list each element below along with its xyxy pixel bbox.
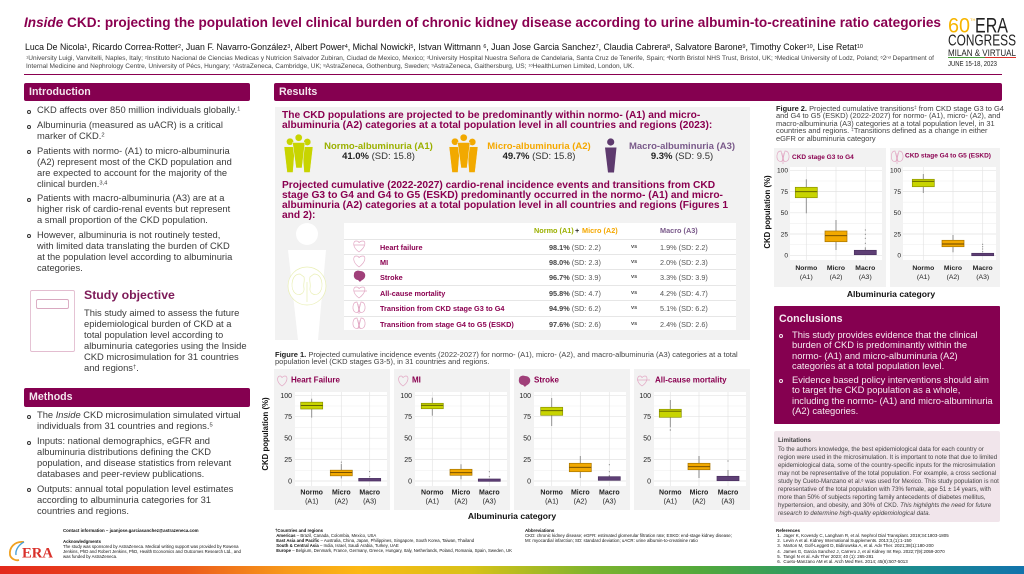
chart: CKD stage G3 to G4: (A1) bbox=[800, 274, 813, 281]
abbreviations footnote: Abbreviations bbox=[525, 528, 554, 532]
bottom gradient bar bbox=[0, 566, 1024, 574]
normo box bbox=[795, 179, 817, 213]
congress logo: 60 bbox=[948, 14, 970, 38]
abbreviations footnote bbox=[525, 528, 732, 543]
affiliations: 1University Luigi, Vanvitelli, Naples, Italy; 2Instituto Nacional de Ciencias Medicas y Nutricion Salvador Zubiran, Ciudad de Mexico, Mexico; 3University Hospital Nuestra Señora de Candelaria, Santa Cruz de Tenerife, Spain; 4North Bristol NHS Trust, Bristol, UK; 5Medical University of Lodz, Poland; 62nd Department of bbox=[26, 54, 934, 62]
intro bullet 5: However, albuminuria is not routinely tested, bbox=[37, 230, 220, 240]
chart: CKD stage G4 to G5: (A1) bbox=[917, 274, 930, 281]
conclusion 2 bbox=[779, 374, 993, 416]
acknowledgments: was funded by AstraZeneca. bbox=[63, 554, 117, 559]
chart: stroke: (A1) bbox=[545, 499, 558, 506]
chart: heart failure: 75 bbox=[284, 414, 292, 421]
row: heart failure: 1.9% (SD: 2.2) bbox=[660, 243, 708, 252]
chart: all-cause mortality: Macro bbox=[718, 490, 738, 497]
chart: heart failure: Macro bbox=[359, 490, 380, 497]
limitations text: research to determine high-quality epidemiological data. bbox=[778, 510, 930, 517]
chart: CKD stage G4 to G5: 50 bbox=[894, 210, 901, 217]
stroke title bbox=[519, 376, 559, 387]
micro box bbox=[330, 462, 352, 478]
acknowledgments bbox=[63, 538, 241, 559]
countries and regions footnote: South & Central Asia – India, Israel, Saudi Arabia, Turkey, UAE bbox=[276, 543, 399, 548]
introduction heading bbox=[24, 83, 250, 101]
panel: results summary bbox=[275, 107, 750, 340]
normo box bbox=[421, 398, 443, 416]
references: 1. Jager K, Kovesdy C, Langham R, et al. Nephrol Dial Transplant. 2019;34:1803-1805 bbox=[777, 533, 949, 538]
chart: heart failure: (A1) bbox=[305, 499, 318, 506]
intro bullet 5: with limited data translating the burden of CKD bbox=[37, 240, 230, 250]
chart: MI: 50 bbox=[404, 436, 412, 443]
methods bullet 3: Outputs: annual total population level estimates bbox=[37, 484, 233, 494]
conclusion 2: to target the CKD population as a whole, bbox=[792, 384, 960, 395]
chart: stroke: (A3) bbox=[603, 499, 616, 506]
intro bullet 3: clinical burden.3,4 bbox=[37, 178, 107, 188]
row: MI: vs bbox=[631, 259, 637, 265]
chart: all-cause mortality bbox=[634, 369, 750, 510]
chart: all-cause mortality: 25 bbox=[643, 457, 651, 464]
micro box bbox=[569, 456, 591, 478]
methods bullet 2 bbox=[27, 436, 231, 480]
references: 4. James G, Garcia Sanchez J, Carrero J, et al Kidney Int Rep. 2022;7(9):2059-2070 bbox=[777, 549, 945, 554]
methods bullet 2: Inputs: national demographics, eGFR and bbox=[37, 436, 210, 446]
intro bullet 5: categories. bbox=[37, 262, 83, 272]
y axis label figure 2: CKD population (%) bbox=[763, 175, 772, 249]
chart: CKD stage G3 to G4: Normo bbox=[795, 265, 817, 272]
figure 2 caption: countries and regions. ‡Transitions defined as a change in either bbox=[776, 126, 988, 135]
congress logo: ERA bbox=[975, 14, 1008, 38]
intro bullet 4: a small proportion of the CKD population. bbox=[37, 215, 208, 225]
chart: CKD stage G3 to G4: (A3) bbox=[859, 274, 872, 281]
study objective text: albuminuria categories using the Inside bbox=[84, 340, 247, 351]
chart: CKD stage G3 to G4: (A2) bbox=[830, 274, 842, 281]
chart: all-cause mortality: 50 bbox=[643, 436, 651, 443]
chart: stroke bbox=[514, 369, 630, 510]
chart: CKD stage G4 to G5: (A3) bbox=[976, 274, 989, 281]
methods bullet 1: The Inside CKD microsimulation simulated virtual bbox=[37, 410, 241, 420]
micro box bbox=[825, 220, 847, 250]
row: stroke: Stroke bbox=[380, 273, 403, 282]
row: heart failure bbox=[344, 239, 736, 255]
contact information: Contact information – juanjose.garciasanchez@astrazeneca.com bbox=[63, 528, 199, 532]
chart: CKD stage G4 to G5: 25 bbox=[894, 231, 901, 238]
y axis label figure 1: CKD population (%) bbox=[261, 397, 270, 471]
row: stroke: vs bbox=[631, 274, 637, 280]
results heading bbox=[274, 83, 1002, 101]
chart: all-cause mortality: (A3) bbox=[721, 499, 735, 506]
chart: CKD stage G3 to G4: 50 bbox=[781, 210, 788, 217]
chart: all-cause mortality: (A2) bbox=[692, 499, 706, 506]
results heading: Results bbox=[279, 86, 317, 98]
intro bullet 3 bbox=[27, 146, 232, 190]
icon: micro-albuminuria people bbox=[449, 134, 478, 172]
chart: MI: 0 bbox=[408, 478, 412, 486]
acknowledgments: The study was sponsored by AstraZeneca. Medical writing support was provided by Rowena bbox=[63, 544, 239, 549]
chart: CKD stage G4 to G5: 75 bbox=[894, 189, 901, 196]
intro bullet 3: (A2) represent most of the CKD population and bbox=[37, 156, 232, 166]
references: 3. Marton M, Golf-Leggett D, Bidirowska A, et al. Adv Ther. 2021;38(1):180-200 bbox=[777, 543, 934, 548]
row: G4 to G5 bbox=[344, 316, 736, 332]
methods bullet 2: population, and disease statistics from relevant bbox=[37, 458, 231, 468]
micro-albuminuria stat: Micro-albuminuria (A2) bbox=[487, 141, 591, 152]
row: stroke: 96.7% (SD: 3.9) bbox=[549, 273, 601, 282]
row: G4 to G5: Transition from stage G4 to G5 (ESKD) bbox=[380, 320, 514, 329]
intro bullet 1: CKD affects over 850 million individuals globally.1 bbox=[37, 105, 240, 115]
acknowledgments: Jenkins, PhD and Robert Jenkins, PhD, Health Economics and Outcomes Research Ltd., and bbox=[63, 549, 241, 554]
chart: heart failure: 50 bbox=[284, 436, 292, 443]
results statement 2 bbox=[282, 180, 728, 221]
affiliations bbox=[26, 54, 934, 70]
limitations text: region were used in the microsimulation. It is important to note that due to limited bbox=[778, 454, 997, 461]
all-cause mortality title: All-cause mortality bbox=[655, 376, 727, 384]
chart: CKD stage G3 to G4: 0 bbox=[784, 253, 788, 260]
methods bullet 2: databases and peer-review publications. bbox=[37, 469, 204, 479]
affiliations: Internal Medicine and Nephrology Centre, University of Pécs, Hungary; 7AstraZeneca, Cambridge, UK; 8AstraZeneca, Gothenburg, Sweden; 9AstraZeneca, Gaithersburg, US; 10HealthLumen Limited, London, UK. bbox=[26, 62, 634, 70]
chart: CKD stage G4 to G5: 100 bbox=[890, 168, 901, 175]
panel: conclusions bbox=[774, 306, 1000, 424]
figure 2 caption: macro-albuminuria (A3) categories at a total population level, in 31 bbox=[776, 118, 995, 128]
G3 to G4 title: CKD stage G3 to G4 bbox=[792, 154, 854, 161]
heart failure title bbox=[278, 376, 340, 386]
countries and regions footnote: Europe – Belgium, Denmark, France, Germany, Greece, Hungary, Italy, Netherlands, Poland, Romania, Spain, Sweden, UK bbox=[276, 548, 512, 553]
chart: stroke: Macro bbox=[599, 490, 620, 497]
methods heading: Methods bbox=[29, 391, 73, 403]
chart: stroke: Micro bbox=[571, 490, 590, 497]
icon: ERA logo bbox=[9, 541, 54, 562]
intro bullet 5: at the population level according to albuminuria bbox=[37, 252, 232, 262]
acknowledgments: Acknowledgments bbox=[63, 538, 101, 544]
chart: stroke: (A2) bbox=[574, 499, 587, 506]
macro box bbox=[598, 464, 620, 480]
chart: CKD stage G4 to G5: Normo bbox=[912, 265, 934, 272]
chart: CKD stage G3 to G4 bbox=[774, 148, 886, 287]
chart: MI: (A2) bbox=[454, 499, 468, 506]
normo-albuminuria stat bbox=[324, 141, 433, 162]
body silhouette bbox=[288, 223, 326, 340]
row: G3 to G4: vs bbox=[631, 305, 637, 311]
countries and regions footnote: East Asia and Pacific – Australia, China, Japan, Philippines, Singapore, South Korea, Taiwan, Thailand bbox=[276, 538, 474, 543]
chart: MI: Micro bbox=[452, 490, 470, 497]
intro bullet 3: Patients with normo- (A1) to micro-albuminuria bbox=[37, 146, 230, 156]
methods bullet 3 bbox=[27, 484, 233, 516]
row: stroke: 3.3% (SD: 3.9) bbox=[660, 273, 708, 282]
results statement 1: The CKD populations are projected to be predominantly within normo- (A1) and micro- bbox=[282, 110, 700, 120]
icon: study objective clipboard bbox=[30, 290, 75, 352]
intro bullet 4: higher risk of cardio-renal events but represent bbox=[37, 204, 230, 214]
micro box bbox=[450, 464, 472, 479]
row: MI: MI bbox=[380, 258, 388, 267]
chart: stroke: 75 bbox=[523, 414, 531, 421]
macro box bbox=[854, 230, 876, 255]
conclusions heading: Conclusions bbox=[779, 313, 843, 325]
intro bullet 4: Patients with macro-albuminuria (A3) are at a bbox=[37, 193, 224, 203]
chart: CKD stage G4 to G5: Macro bbox=[973, 265, 993, 272]
chart: stroke: 25 bbox=[523, 457, 531, 464]
chart: CKD stage G4 to G5: (A2) bbox=[947, 274, 959, 281]
figure 1 caption bbox=[275, 350, 738, 366]
chart: MI: Macro bbox=[479, 490, 500, 497]
row: MI: 98.0% (SD: 2.3) bbox=[549, 258, 601, 267]
table header: Micro (A2) bbox=[582, 226, 618, 235]
limitations text: epidemiological data, some of the country-specific inputs for the microsimulation bbox=[778, 462, 995, 469]
intro bullet 2: marker of CKD.2 bbox=[37, 131, 105, 141]
normo box bbox=[912, 174, 934, 193]
authors: Luca De Nicola1, Ricardo Correa-Rotter2, Juan F. Navarro-González3, Albert Power4, Michal Nowicki5, Istvan Wittmann 6, Juan Jose Garcia Sanchez7, Claudia Cabrera8, Salvatore Barone9, Timothy Coker10, Lise Retat10 bbox=[25, 42, 863, 52]
intro bullet 2: Albuminuria (measured as uACR) is a critical bbox=[37, 120, 223, 130]
results statement 2: and 2): bbox=[282, 210, 315, 221]
chart: MI: 100 bbox=[400, 393, 412, 400]
chart: MI: (A3) bbox=[483, 499, 496, 506]
conclusion 2: including the normo- (A1) and micro-albuminuria bbox=[792, 395, 993, 406]
table header: Normo (A1) bbox=[534, 226, 574, 235]
table: cumulative events by albuminuria category bbox=[344, 223, 736, 330]
MI title bbox=[399, 376, 421, 386]
limitations text: more than 50% of subjects reporting family antecedents of diabetes mellitus, bbox=[778, 494, 986, 501]
figure 2 caption: eGFR or albuminuria category bbox=[776, 134, 876, 142]
micro box bbox=[942, 235, 964, 252]
row: G3 to G4: Transition from CKD stage G3 to G4 bbox=[380, 304, 504, 313]
row: MI: 2.0% (SD: 2.3) bbox=[660, 258, 708, 267]
countries and regions footnote: †Countries and regions bbox=[275, 528, 323, 532]
row: G3 to G4: 5.1% (SD: 6.2) bbox=[660, 304, 708, 313]
macro box bbox=[972, 244, 994, 256]
chart: heart failure: Normo bbox=[300, 490, 323, 497]
chart: heart failure bbox=[274, 369, 390, 510]
micro box bbox=[688, 456, 710, 478]
study objective heading: Study objective bbox=[84, 288, 175, 302]
chart: CKD stage G3 to G4: 75 bbox=[781, 189, 788, 196]
intro bullet 2 bbox=[27, 120, 223, 142]
chart: all-cause mortality: (A1) bbox=[664, 499, 677, 506]
normo box bbox=[659, 400, 681, 431]
G4 to G5 title: CKD stage G4 to G5 (ESKD) bbox=[905, 152, 991, 160]
icon: normo-albuminuria people bbox=[284, 134, 313, 172]
table row icons bbox=[352, 240, 367, 329]
study objective text: This study aimed to assess the future bbox=[84, 307, 239, 318]
results statement 1 bbox=[282, 110, 712, 131]
congress logo: JUNE 15-18, 2023 bbox=[948, 59, 997, 68]
limitations text bbox=[778, 446, 999, 517]
normo-albuminuria stat: Normo-albuminuria (A1) bbox=[324, 141, 433, 152]
chart: all-cause mortality: Normo bbox=[659, 490, 682, 497]
chart: stroke: 50 bbox=[523, 436, 531, 443]
chart: stroke: 0 bbox=[527, 478, 531, 486]
conclusion 1: normo- (A1) and micro-albuminuria (A2) bbox=[792, 350, 958, 361]
normo-albuminuria stat: 41.0% (SD: 15.8) bbox=[342, 151, 415, 162]
limitations text: study by Cueto-Manzano et al.6 was used for Mexico. This study population is not bbox=[778, 478, 999, 485]
chart: MI: 25 bbox=[404, 457, 412, 464]
references: 5. Tangri N et al. Adv Ther 2023; 40 (1): 265-281 bbox=[777, 554, 874, 559]
all-cause mortality title bbox=[637, 376, 727, 386]
chart: MI: (A1) bbox=[426, 499, 439, 506]
countries and regions footnote bbox=[275, 528, 512, 553]
conclusion 1: categories at a total population level. bbox=[792, 360, 944, 371]
intro bullet 4 bbox=[27, 193, 230, 226]
macro box bbox=[717, 460, 739, 481]
conclusion 2: Evidence based policy interventions should aim bbox=[792, 374, 989, 385]
limitations text: may not be representative of the total population. For example, a cross sectional bbox=[778, 470, 996, 477]
chart: CKD stage G4 to G5: Micro bbox=[944, 265, 962, 272]
methods bullet 2: albuminuria distributions defining the CKD bbox=[37, 447, 211, 457]
row: all-cause mortality: 95.8% (SD: 4.7) bbox=[549, 289, 601, 298]
chart: heart failure: (A3) bbox=[363, 499, 376, 506]
conclusion 1 bbox=[779, 329, 978, 371]
limitations text: hypertension, and obesity, and 30% of CKD. This highlights the need for future bbox=[778, 502, 991, 509]
macro box bbox=[359, 471, 381, 481]
icon: macro-albuminuria person bbox=[605, 138, 616, 172]
chart: CKD stage G3 to G4: Macro bbox=[855, 265, 875, 272]
study objective text: and regions†. bbox=[84, 362, 139, 373]
references: 2. Levin A et al. Kidney International Supplements. 2013;3,(1):1-150 bbox=[777, 538, 911, 543]
x axis label figure 1: Albuminuria category bbox=[468, 511, 556, 521]
chart: heart failure: (A2) bbox=[335, 499, 348, 506]
row: MI bbox=[344, 254, 736, 270]
results statement 2: albuminuria (A2) categories at a total population level in all countries and regions (Figures 1 bbox=[282, 200, 728, 211]
table header: + bbox=[575, 226, 579, 235]
row: all-cause mortality bbox=[344, 285, 736, 301]
references: References bbox=[776, 528, 800, 532]
stroke title: Stroke bbox=[534, 376, 559, 384]
row: all-cause mortality: vs bbox=[631, 290, 637, 296]
title: Inside CKD: projecting the population level clinical burden of chronic kidney disease according to urine albumin-to-creatinine ratio categories bbox=[24, 15, 941, 30]
row: heart failure: Heart failure bbox=[380, 243, 423, 252]
methods bullet 3: countries and regions. bbox=[37, 506, 129, 516]
methods heading bbox=[24, 388, 250, 407]
chart: heart failure: 100 bbox=[280, 393, 292, 400]
limitations heading: Limitations bbox=[778, 437, 811, 444]
table header: Macro (A3) bbox=[660, 226, 698, 235]
conclusion 1: burden of CKD is predominantly within the bbox=[792, 339, 967, 350]
table header bbox=[534, 226, 698, 235]
header rule bbox=[24, 74, 1002, 75]
row: heart failure: vs bbox=[631, 244, 637, 250]
macro-albuminuria stat bbox=[629, 141, 735, 162]
chart: heart failure: 0 bbox=[288, 478, 292, 486]
panel: limitations bbox=[774, 431, 1000, 522]
study objective text bbox=[84, 307, 247, 373]
chart: CKD stage G3 to G4: 25 bbox=[781, 231, 788, 238]
chart: stroke: 100 bbox=[519, 393, 531, 400]
icon: ERA logo: ERA bbox=[22, 546, 54, 562]
macro-albuminuria stat: 9.3% (SD: 9.5) bbox=[651, 151, 713, 162]
chart: all-cause mortality: 100 bbox=[639, 393, 651, 400]
chart: MI bbox=[394, 369, 510, 510]
results statement 2: Projected cumulative (2022-2027) cardio-renal incidence events and transitions from CKD bbox=[282, 180, 715, 190]
intro bullet 3: are expected to account for the majority of the bbox=[37, 168, 227, 178]
results statement 2: stage G3 to G4 and G4 to G5 (ESKD) predominantly occurred in the normo- (A1) and micro- bbox=[282, 190, 723, 201]
study objective text: total population level according to bbox=[84, 329, 223, 340]
chart: CKD stage G4 to G5 bbox=[890, 148, 1000, 287]
chart: heart failure: Micro bbox=[332, 490, 351, 497]
limitations text: To the authors knowledge, the best epidemiological data for each country or bbox=[778, 446, 984, 453]
congress logo bbox=[948, 14, 1016, 68]
row: heart failure: 98.1% (SD: 2.2) bbox=[549, 243, 601, 252]
macro-albuminuria stat: Macro-albuminuria (A3) bbox=[629, 141, 735, 152]
intro bullet 5 bbox=[27, 230, 232, 274]
chart: heart failure: 25 bbox=[284, 457, 292, 464]
methods bullet 1: individuals from 31 countries and regions.5 bbox=[37, 421, 213, 431]
row: G4 to G5: 97.6% (SD: 2.6) bbox=[549, 320, 601, 329]
figure 1 caption: population level (CKD stages G3-5), in 31 countries and regions. bbox=[275, 357, 489, 366]
chart: CKD stage G3 to G4: Micro bbox=[827, 265, 845, 272]
conclusion 1: This study provides evidence that the clinical bbox=[792, 329, 978, 340]
MI title: MI bbox=[412, 376, 421, 384]
chart: all-cause mortality: 75 bbox=[643, 414, 651, 421]
normo box bbox=[541, 398, 563, 426]
row: G4 to G5: 2.4% (SD: 2.6) bbox=[660, 320, 708, 329]
abbreviations footnote: CKD: chronic kidney disease; eGFR: estimated glomerular filtration rate; ESKD: end-stage kidney disease; bbox=[525, 533, 732, 538]
abbreviations footnote: MI: myocardial infarction; SD: standard deviation; uACR: urine albumin-to-creatinine ratio bbox=[525, 538, 698, 543]
references bbox=[776, 528, 949, 564]
row: stroke bbox=[344, 269, 736, 285]
row: all-cause mortality: All-cause mortality bbox=[380, 289, 445, 298]
micro-albuminuria stat bbox=[487, 141, 591, 162]
chart: CKD stage G4 to G5: 0 bbox=[897, 253, 901, 260]
congress logo: TH bbox=[970, 17, 975, 22]
chart: MI: Normo bbox=[421, 490, 444, 497]
chart: all-cause mortality: 0 bbox=[647, 478, 651, 486]
figure 2 caption bbox=[776, 104, 1004, 142]
study objective text: epidemiological burden of CKD at a bbox=[84, 318, 231, 329]
normo box bbox=[301, 399, 323, 418]
row: G4 to G5: vs bbox=[631, 321, 637, 327]
conclusion 2: (A2) categories. bbox=[792, 405, 858, 416]
figure 2 caption: and G4 to G5 (ESKD) (2022-2027) for normo- (A1), micro- (A2), and bbox=[776, 111, 1000, 120]
methods bullet 1 bbox=[27, 410, 241, 432]
macro box bbox=[478, 471, 500, 481]
figure 2 caption: Figure 2. Projected cumulative transitions‡ from CKD stage G3 to G4 bbox=[776, 104, 1004, 112]
figure 1 caption: Figure 1. Projected cumulative incidence events (2022-2027) for normo- (A1), micro- (A2), and macro-albuminuria (A3) categories at a total bbox=[275, 350, 738, 359]
limitations text: representative of the total population with 73% female, age 51 ± 14 years, with bbox=[778, 486, 991, 493]
study objective text: CKD microsimulation for 31 countries bbox=[84, 351, 239, 362]
introduction heading: Introduction bbox=[29, 86, 91, 98]
methods bullet 3: according to albuminuria categories for 31 bbox=[37, 494, 211, 504]
chart: stroke: Normo bbox=[540, 490, 563, 497]
row: G3 to G4: 94.9% (SD: 6.2) bbox=[549, 304, 601, 313]
heart failure title: Heart Failure bbox=[291, 376, 340, 384]
chart: all-cause mortality: Micro bbox=[690, 490, 708, 497]
chart: CKD stage G3 to G4: 100 bbox=[777, 168, 788, 175]
results statement 1: albuminuria (A2) categories at a total population level in all countries and regions (2023): bbox=[282, 120, 712, 131]
references: 6. Cueto-Manzano AM et al. Arch Med Res. 2014; 45(6):507-5013 bbox=[777, 559, 908, 564]
row: G3 to G4 bbox=[344, 300, 736, 316]
countries and regions footnote: Americas – Brazil, Canada, Colombia, Mexico, USA bbox=[276, 533, 376, 538]
micro-albuminuria stat: 49.7% (SD: 15.8) bbox=[503, 151, 575, 162]
row: all-cause mortality: 4.2% (SD: 4.7) bbox=[660, 289, 708, 298]
chart: MI: 75 bbox=[404, 414, 412, 421]
x axis label figure 2: Albuminuria category bbox=[847, 289, 935, 299]
